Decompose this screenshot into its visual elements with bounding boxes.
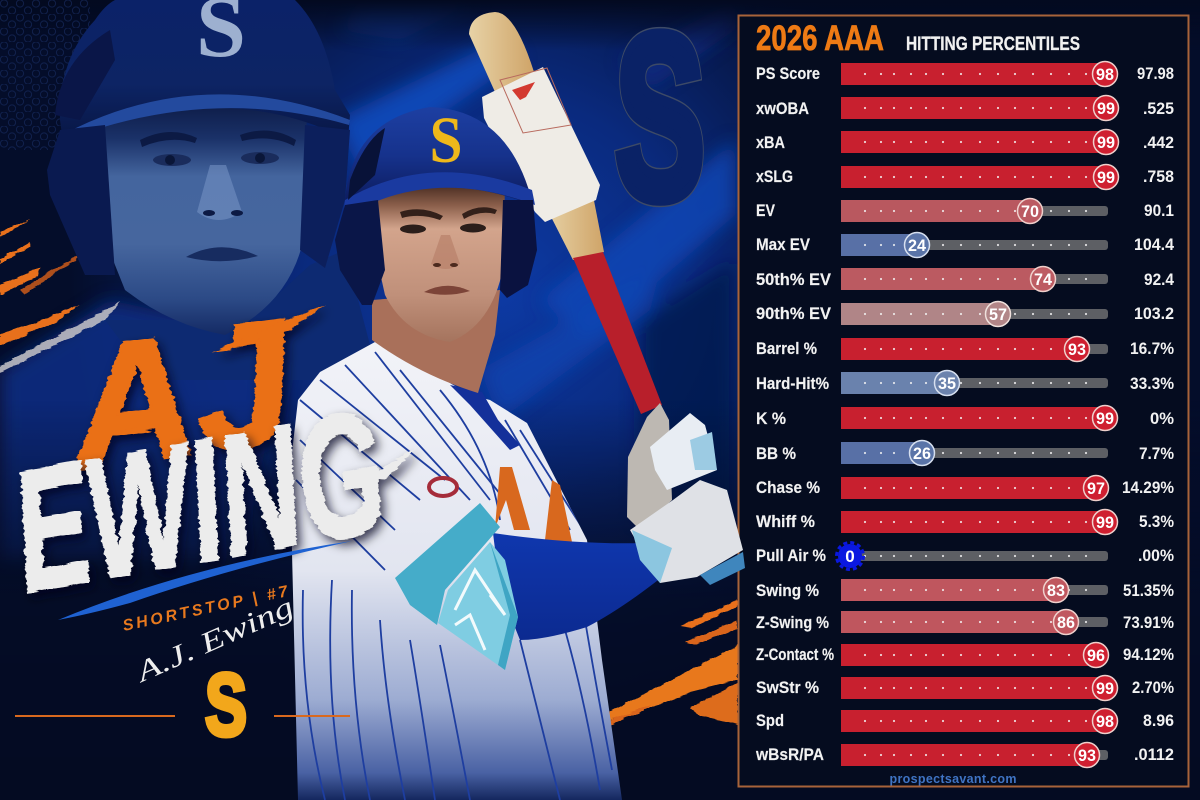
batting gloves xyxy=(627,403,745,585)
row: 50th% EV xyxy=(756,266,1174,292)
row: BB %: 26 xyxy=(913,444,931,463)
row: xBA xyxy=(756,130,1174,154)
row: wBsR/PA: .0112 xyxy=(1134,745,1174,764)
row: Swing %: 51.35% xyxy=(1123,581,1174,600)
row: xSLG: 99 xyxy=(1097,168,1115,187)
row: 50th% EV: 50th% EV xyxy=(756,270,832,289)
row: Barrel %: 93 xyxy=(1068,340,1086,359)
name: AJ: AJ xyxy=(52,283,307,508)
row: BB %: BB % xyxy=(756,444,796,463)
J top flourish xyxy=(212,304,325,352)
row: Hard-Hit% xyxy=(756,370,1174,396)
row: 50th% EV: 92.4 xyxy=(1144,270,1174,289)
sleeve patch xyxy=(429,478,457,496)
panel: hitting percentiles xyxy=(738,16,1188,786)
row: Chase %: 97 xyxy=(1087,479,1105,498)
row: Barrel %: Barrel % xyxy=(756,339,817,358)
row: PS Score xyxy=(756,62,1174,86)
row: Z-Contact %: Z-Contact % xyxy=(756,645,834,664)
source credit: prospectsavant.com xyxy=(890,772,1016,786)
row: Max EV: Max EV xyxy=(756,235,811,254)
player xyxy=(290,12,662,800)
row: Spd: 8.96 xyxy=(1143,711,1174,730)
row: Hard-Hit%: 35 xyxy=(938,374,956,393)
row: Whiff %: 99 xyxy=(1096,513,1114,532)
row: Hard-Hit%: 33.3% xyxy=(1130,374,1174,393)
neck xyxy=(372,290,500,393)
name: EWING xyxy=(0,375,416,628)
panel subtitle: HITTING PERCENTILES xyxy=(906,34,1080,55)
row: xSLG: xSLG xyxy=(756,167,793,186)
row: 50th% EV: 74 xyxy=(1034,270,1053,289)
row: Pull Air %: Pull Air % xyxy=(756,546,826,565)
row: xwOBA xyxy=(756,96,1174,120)
row: EV: 90.1 xyxy=(1144,201,1174,220)
row: EV xyxy=(756,198,1174,224)
row: Whiff %: 5.3% xyxy=(1139,512,1174,531)
panel title: 2026 AAA xyxy=(756,19,884,58)
position and number: SHORTSTOP | #7 xyxy=(121,583,290,635)
row: Swing %: 83 xyxy=(1047,581,1065,600)
row: EV: 70 xyxy=(1021,202,1039,221)
row: PS Score: PS Score xyxy=(756,64,820,83)
row: Z-Contact % xyxy=(756,642,1174,668)
row: xBA: xBA xyxy=(756,133,785,152)
row: Z-Swing %: 86 xyxy=(1057,613,1075,632)
row: Max EV: 104.4 xyxy=(1134,235,1175,254)
row: SwStr % xyxy=(756,676,1174,700)
orange paint streaks left xyxy=(0,219,120,373)
row: xBA: 99 xyxy=(1097,133,1115,152)
helmet xyxy=(335,107,537,305)
row: EV: EV xyxy=(756,201,776,220)
facial features xyxy=(400,207,497,295)
row: BB % xyxy=(756,440,1174,466)
face xyxy=(370,185,505,342)
row: Hard-Hit%: Hard-Hit% xyxy=(756,374,829,393)
row: Spd xyxy=(756,708,1174,734)
row: xSLG: .758 xyxy=(1143,167,1174,186)
row: K %: 0% xyxy=(1150,409,1174,428)
row: wBsR/PA: 93 xyxy=(1078,746,1096,765)
row: Z-Swing % xyxy=(756,610,1174,634)
row: Z-Swing %: Z-Swing % xyxy=(756,613,829,632)
G flourish xyxy=(365,448,416,480)
row: Spd: 98 xyxy=(1096,712,1114,731)
row: SwStr %: 99 xyxy=(1096,679,1114,698)
row: Pull Air %: .00% xyxy=(1138,546,1174,565)
row: 90th% EV: 90th% EV xyxy=(756,304,832,323)
row: Pull Air %: 0 xyxy=(845,547,855,566)
ghost shoulders xyxy=(105,250,370,380)
row: 90th% EV: 103.2 xyxy=(1134,304,1174,323)
row: K % xyxy=(756,406,1174,430)
ghost features xyxy=(140,131,296,261)
sleeve arm xyxy=(493,533,662,640)
row: Barrel %: 16.7% xyxy=(1130,339,1174,358)
row: BB %: 7.7% xyxy=(1139,444,1174,463)
bat xyxy=(469,12,662,414)
jersey lettering xyxy=(495,467,572,542)
row: PS Score: 98 xyxy=(1096,65,1114,84)
row: Whiff % xyxy=(756,510,1174,534)
row: SwStr %: 2.70% xyxy=(1132,678,1174,697)
row: Pull Air % xyxy=(756,542,1174,570)
ghost team logo xyxy=(615,0,705,248)
row: Whiff %: Whiff % xyxy=(756,512,815,531)
blue swoosh xyxy=(58,541,352,620)
row: K %: K % xyxy=(756,409,786,428)
row: xwOBA: 99 xyxy=(1097,99,1115,118)
orange paint streaks right xyxy=(560,600,738,745)
elbow guard xyxy=(395,503,518,670)
row: PS Score: 97.98 xyxy=(1137,64,1174,83)
row: wBsR/PA: wBsR/PA xyxy=(755,745,824,764)
ghost face xyxy=(103,95,307,335)
row: xwOBA: .525 xyxy=(1143,99,1174,118)
row: Chase %: 14.29% xyxy=(1122,478,1174,497)
row: Spd: Spd xyxy=(756,711,784,730)
row: Swing %: Swing % xyxy=(756,581,819,600)
row: wBsR/PA xyxy=(755,742,1174,768)
row: xSLG xyxy=(756,164,1174,190)
jersey xyxy=(290,342,622,800)
row: 90th% EV: 57 xyxy=(989,305,1007,324)
row: xwOBA: xwOBA xyxy=(756,99,809,118)
row: Z-Contact %: 94.12% xyxy=(1123,645,1174,664)
row: Barrel % xyxy=(756,336,1174,362)
row: SwStr %: SwStr % xyxy=(756,678,819,697)
team logo: S xyxy=(205,655,247,754)
ghost helmet xyxy=(47,0,350,275)
helmet logo: S xyxy=(430,104,462,177)
row: Chase %: Chase % xyxy=(756,478,820,497)
portrait: large ghost head xyxy=(47,0,370,380)
row: Z-Contact %: 96 xyxy=(1087,646,1105,665)
row: 90th% EV xyxy=(756,302,1174,326)
row: Z-Swing %: 73.91% xyxy=(1123,613,1174,632)
row: Chase % xyxy=(756,476,1174,500)
signature: A.J. Ewing xyxy=(129,591,298,689)
row: K %: 99 xyxy=(1096,409,1114,428)
row: xBA: .442 xyxy=(1143,133,1174,152)
row: Swing % xyxy=(756,578,1174,602)
collar xyxy=(450,385,520,450)
name: EWING: EWING xyxy=(0,375,399,628)
row: Max EV: 24 xyxy=(908,236,927,255)
row: Max EV xyxy=(756,232,1175,258)
